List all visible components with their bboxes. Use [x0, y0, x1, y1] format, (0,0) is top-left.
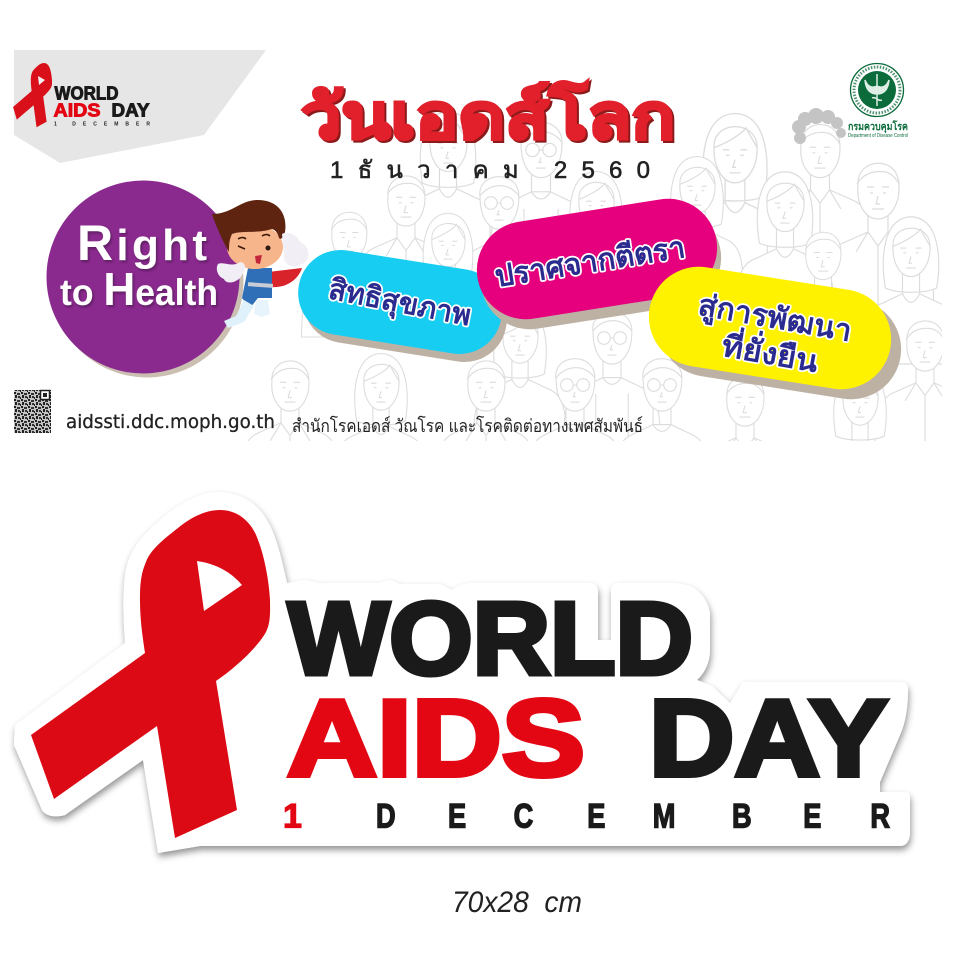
face: [227, 225, 283, 269]
badge text: [60, 215, 218, 315]
mouth: [255, 255, 262, 264]
small ribbon: [13, 63, 52, 127]
badge text: to Health: [60, 263, 218, 315]
pill body: [470, 192, 724, 326]
small World AIDS Day logo: [13, 63, 150, 128]
pill: free from stigma: [470, 192, 728, 336]
mascot: superhero boy: [212, 200, 309, 328]
emblem: Department of Disease Control: [848, 64, 908, 139]
hair: [212, 200, 285, 252]
website URL: aidssti.ddc.moph.go.th: [66, 411, 275, 433]
small wordmark: AIDS: [54, 100, 100, 120]
panel: campaign banner: [13, 50, 942, 441]
body: [242, 268, 272, 308]
pill shadow: [652, 270, 908, 406]
corner tab: grey logo background: [14, 50, 266, 163]
pill text line 1: สู่การพัฒนา: [695, 289, 854, 350]
pill text: สิทธิสุขภาพ: [326, 274, 474, 333]
date number: 1: 1: [283, 798, 302, 836]
QR code: [14, 390, 51, 433]
department name in English: Department of Disease Control: [848, 133, 908, 139]
badge: Right to Health: [46, 180, 244, 378]
background: line-art crowd of people: [248, 112, 942, 441]
open eye: [266, 246, 270, 250]
bureau name: สำนักโรคเอดส์ วัณโรค และโรคติดต่อทางเพศสัมพันธ์: [292, 415, 643, 436]
caption: sticker size: 70x28 cm: [452, 886, 582, 919]
wordmark: AIDS: AIDS: [287, 678, 585, 800]
badge shadow: [50, 184, 244, 378]
small wordmark: [54, 84, 150, 128]
badge text: Right: [77, 215, 207, 271]
pill: right to health: [292, 244, 513, 368]
small wordmark: WORLD: [54, 84, 118, 104]
eyebrows and winking eye: [238, 234, 270, 249]
date month: DECEMBER: DECEMBER: [376, 797, 890, 835]
wordmark: WORLD: WORLD: [288, 581, 693, 696]
belt: [248, 282, 273, 288]
left glove: [217, 262, 245, 282]
right boot: [254, 300, 270, 317]
sticker die-cut outline: [14, 492, 910, 853]
curly hair on crowd figure: [792, 108, 846, 144]
seal: [850, 64, 904, 116]
red ribbon: [31, 510, 270, 838]
pill body: [642, 260, 898, 396]
pill text: ปราศจากตีตรา: [493, 231, 687, 294]
small wordmark: 1 DECEMBER: [54, 122, 150, 128]
title: World AIDS Day in Thai: วันเอดส์โลก: [301, 80, 675, 152]
wordmark: DAY: DAY: [649, 678, 888, 800]
subtitle: date: 1ธันวาคม 2560: [330, 157, 650, 184]
cape: [268, 268, 302, 287]
badge circle: [46, 180, 240, 374]
pill body: [292, 244, 508, 360]
right glove: [282, 233, 309, 266]
pill shadow: [474, 202, 728, 336]
ribbon loop cut-out: [197, 561, 242, 611]
pill text line 2: ที่ยั่งยืน: [719, 324, 822, 379]
department name: กรมควบคุมโรค: [848, 120, 908, 134]
panel: large World AIDS Day sticker: [14, 492, 910, 853]
pill: towards sustainable development: [642, 260, 908, 406]
pill shadow: [297, 252, 513, 368]
left boot: [224, 300, 254, 328]
small wordmark: DAY: [112, 100, 150, 120]
small ribbon cut-out: [38, 76, 45, 85]
